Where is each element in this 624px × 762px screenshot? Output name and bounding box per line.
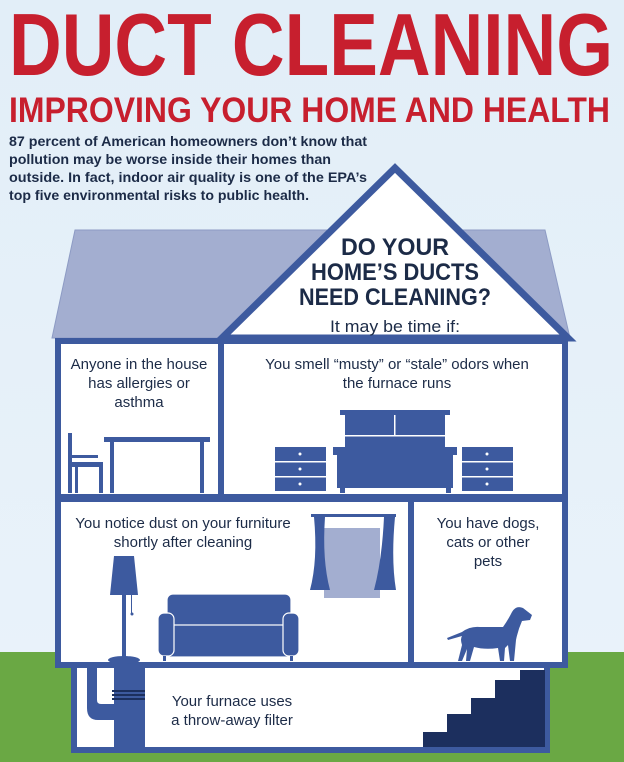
gable: HOME’S DUCTS <box>311 259 479 286</box>
ground <box>0 652 624 762</box>
room: dust: shortly after cleaning <box>114 534 252 551</box>
room: odors: You smell “musty” or “stale” odors when <box>265 356 529 373</box>
basement: a throw-away filter <box>171 712 293 729</box>
room: allergies: asthma <box>114 394 164 411</box>
house <box>52 168 570 753</box>
room: odors: the furnace runs <box>343 375 451 392</box>
icon: lamp <box>108 556 140 664</box>
roof <box>52 230 570 338</box>
room: pets: You have dogs, <box>437 515 539 532</box>
room: pets: pets <box>474 553 502 570</box>
gable: NEED CLEANING? <box>299 284 491 311</box>
intro text: 87 percent of American homeowners don’t know that <box>9 133 367 149</box>
basement <box>71 668 550 753</box>
gable: DO YOUR <box>341 234 449 261</box>
room: dust: You notice dust on your furniture <box>75 515 291 532</box>
gable <box>222 168 568 338</box>
room: dust <box>61 502 408 664</box>
intro text <box>9 133 367 203</box>
icon: dog <box>447 607 532 661</box>
icon: furnace <box>87 668 145 747</box>
room: allergies: Anyone in the house <box>71 356 207 373</box>
room: allergies: has allergies or <box>88 375 190 392</box>
icon: couch <box>158 594 299 661</box>
room: odors <box>224 344 562 494</box>
room: pets <box>414 502 562 662</box>
upper floor walls <box>55 338 568 668</box>
icon: curtain <box>310 514 396 598</box>
room: allergies <box>61 344 218 494</box>
basement: Your furnace uses <box>172 693 292 710</box>
intro text: outside. In fact, indoor air quality is one of the EPA’s <box>9 169 367 185</box>
room: pets: cats or other <box>446 534 530 551</box>
icon: stairs <box>423 670 545 747</box>
intro text: pollution may be worse inside their homes than <box>9 151 331 167</box>
gable: It may be time if: <box>330 317 460 336</box>
icon: chair and table <box>68 433 210 493</box>
icon: bed and nightstands <box>275 410 513 493</box>
intro text: top five environmental risks to public health. <box>9 187 309 203</box>
